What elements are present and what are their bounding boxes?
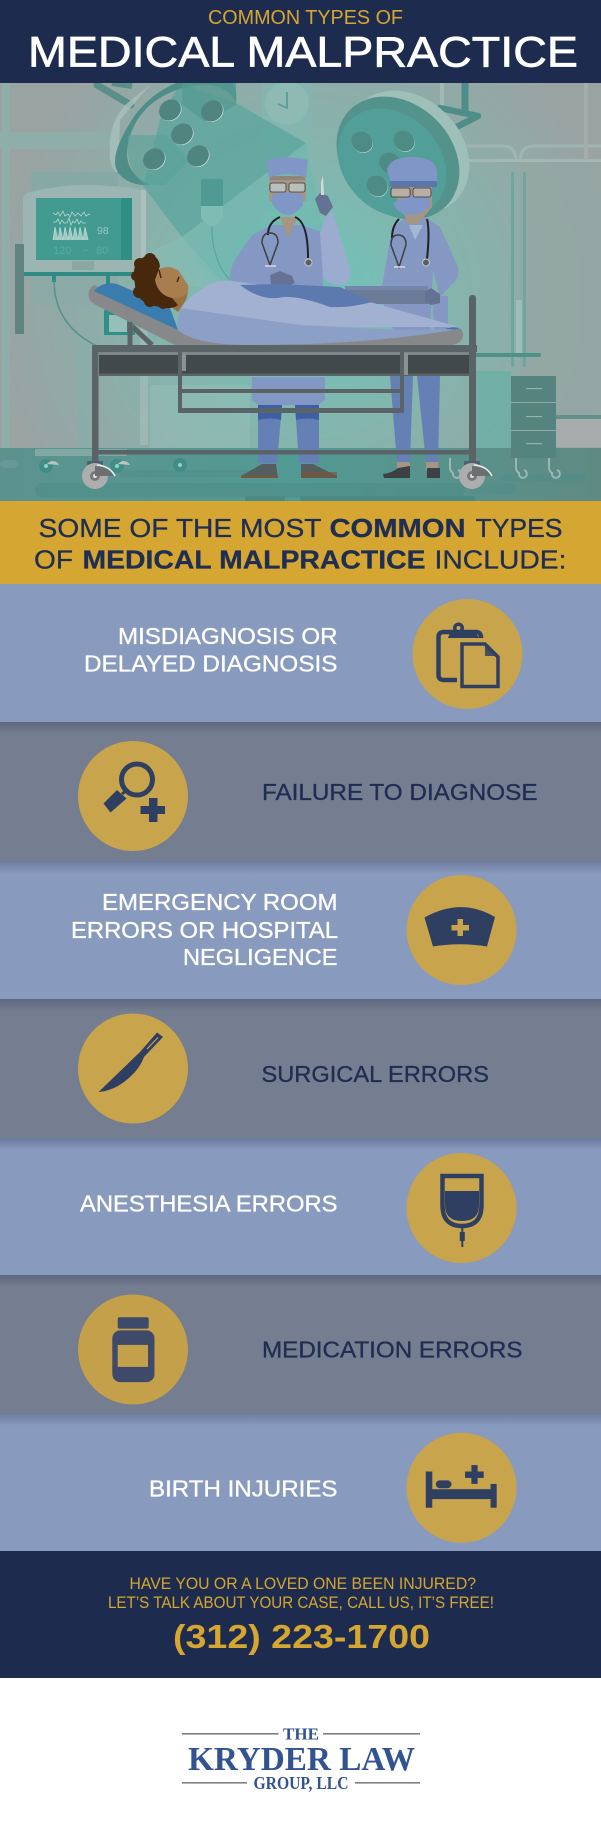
right surgical lamp bbox=[336, 83, 482, 219]
call to action banner bbox=[0, 1551, 601, 1678]
subheading line one: TYPES bbox=[476, 513, 562, 543]
subheading line two: INCLUDE: bbox=[434, 544, 566, 574]
row: birth injuries bbox=[0, 1413, 601, 1551]
vital signs monitor: 120 bbox=[53, 245, 71, 257]
row: surgical errors bbox=[0, 999, 601, 1138]
logo word: kryder law: KRYDER LAW bbox=[188, 1741, 415, 1778]
left surgical lamp bbox=[97, 77, 236, 185]
bed mattress platform bbox=[89, 285, 463, 345]
wall pole and monitor cable bbox=[15, 244, 97, 346]
icon: clipboard bbox=[412, 599, 522, 709]
icon: magnifying glass bbox=[78, 741, 188, 851]
icon: IV bag bbox=[406, 1153, 516, 1263]
label: emergency room: NEGLIGENCE bbox=[183, 944, 338, 970]
subheading line two bbox=[34, 544, 566, 574]
icon: nurse cap bbox=[406, 875, 516, 985]
wall sign behind bed bbox=[104, 310, 135, 335]
monitor waveforms bbox=[53, 211, 90, 240]
background cart bbox=[35, 449, 187, 473]
label: surgical errors: SURGICAL ERRORS bbox=[262, 1061, 489, 1087]
label: emergency room: ERRORS OR HOSPITAL bbox=[71, 917, 338, 943]
IV drip bag bbox=[201, 179, 230, 280]
light beams bbox=[143, 86, 318, 280]
call to action text: LET’S TALK ABOUT YOUR CASE, CALL US, IT’S FREE! bbox=[108, 1594, 494, 1612]
label: birth injuries: BIRTH INJURIES bbox=[149, 1475, 338, 1501]
label: misdiagnosis bbox=[84, 623, 338, 676]
label: misdiagnosis: DELAYED DIAGNOSIS bbox=[84, 650, 338, 676]
row: misdiagnosis bbox=[0, 584, 601, 722]
subheading line one: COMMON bbox=[330, 513, 466, 543]
footer logo bbox=[0, 1678, 601, 1836]
logo word: group llc: GROUP, LLC bbox=[254, 1773, 348, 1793]
hospital bed bbox=[82, 283, 492, 489]
label: medication errors: MEDICATION ERRORS bbox=[262, 1336, 522, 1362]
subheading line one: SOME OF THE MOST bbox=[38, 513, 322, 543]
logo word: the: THE bbox=[283, 1725, 319, 1744]
floor bbox=[0, 448, 601, 501]
label: emergency room: EMERGENCY ROOM bbox=[102, 889, 338, 915]
subheading line two: OF bbox=[34, 544, 73, 574]
wall pipes and background bbox=[0, 83, 601, 448]
bed side rail bbox=[178, 352, 404, 413]
label: anesthesia errors: ANESTHESIA ERRORS bbox=[80, 1190, 338, 1216]
label: failure to diagnose: FAILURE TO DIAGNOSE bbox=[262, 779, 538, 805]
label: misdiagnosis: MISDIAGNOSIS OR bbox=[118, 623, 338, 649]
subheading line two: MEDICAL MALPRACTICE bbox=[82, 544, 426, 574]
blue pillow bbox=[94, 283, 178, 330]
operating room illustration bbox=[0, 66, 601, 501]
patient head bbox=[131, 253, 188, 312]
row: failure to diagnose bbox=[0, 722, 601, 861]
front right caster bbox=[459, 461, 492, 489]
assisting surgeon bbox=[345, 157, 458, 335]
monitor numbers: 98 bbox=[97, 225, 109, 237]
call to action text bbox=[108, 1575, 494, 1612]
standing surgeon legs and shoes bbox=[241, 376, 440, 478]
label: emergency room bbox=[71, 889, 338, 970]
surgeon with scalpel bbox=[230, 158, 350, 295]
header kicker: COMMON TYPES OF bbox=[208, 7, 403, 29]
icon: scalpel bbox=[78, 1014, 188, 1124]
main title: MEDICAL MALPRACTICE bbox=[28, 28, 578, 76]
wall clock bbox=[266, 82, 308, 124]
subheading line one bbox=[38, 513, 562, 543]
gold subheading band bbox=[0, 501, 601, 584]
row: medication errors bbox=[0, 1275, 601, 1413]
call to action text: HAVE YOU OR A LOVED ONE BEEN INJURED? bbox=[130, 1575, 476, 1593]
icon: pill bottle bbox=[78, 1294, 188, 1404]
icon: hospital bed bbox=[406, 1433, 516, 1543]
row: emergency room bbox=[0, 861, 601, 999]
vital signs monitor: ~ bbox=[82, 245, 88, 257]
right shelf and drawers bbox=[450, 353, 601, 478]
front left caster bbox=[82, 461, 115, 489]
clipboard tablet bbox=[346, 290, 428, 304]
vital signs monitor bbox=[23, 172, 146, 284]
blanket over patient bbox=[177, 281, 462, 345]
header banner bbox=[0, 0, 601, 83]
vital signs monitor: 80 bbox=[96, 245, 108, 257]
row: anesthesia errors bbox=[0, 1138, 601, 1275]
phone number: (312) 223-1700 bbox=[173, 1619, 430, 1656]
